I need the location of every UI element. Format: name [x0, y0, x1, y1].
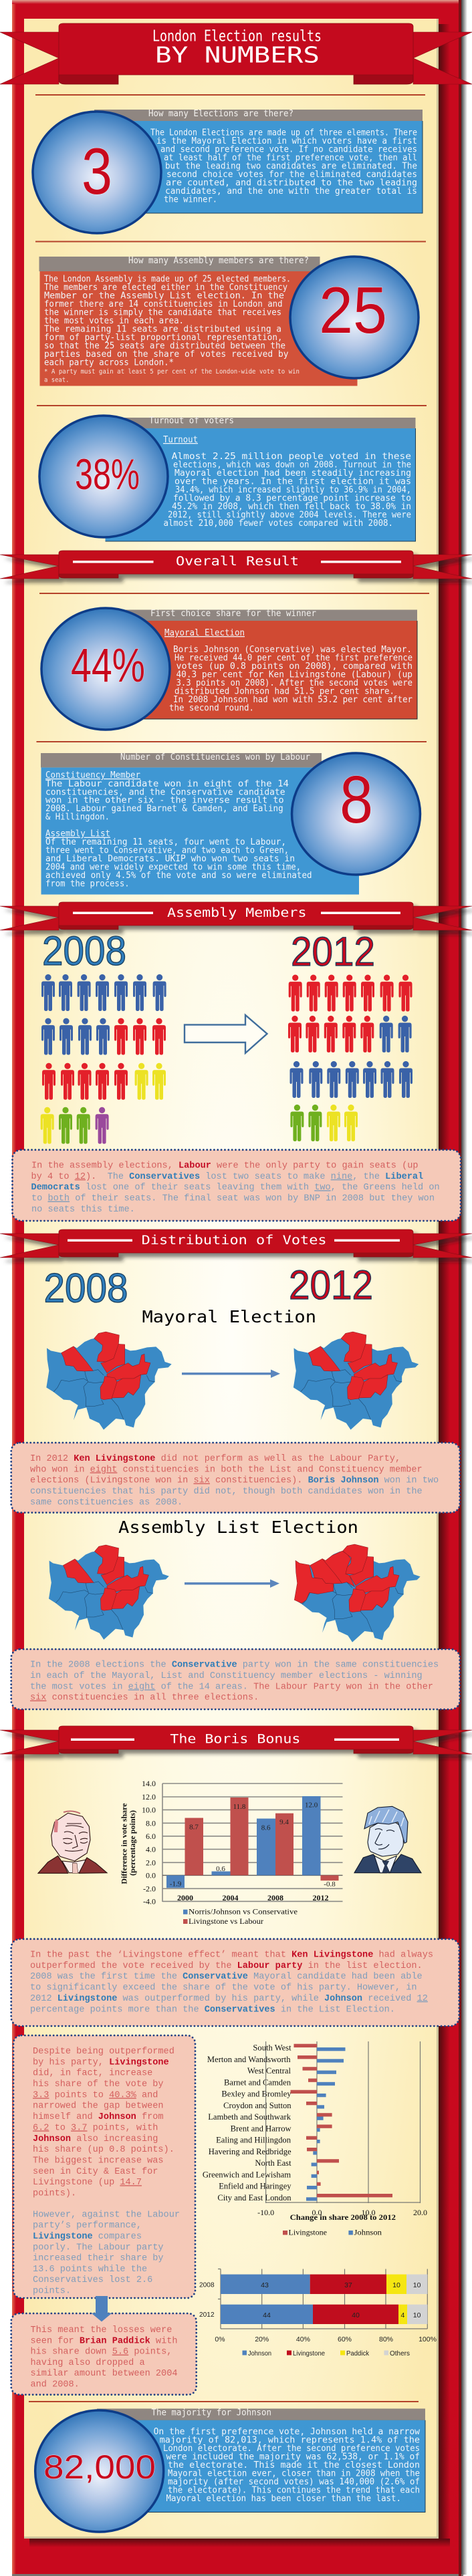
heading ribbon: distribution of votes: Distribution of Votes	[142, 1234, 327, 1248]
callout: assembly elections: In the assembly elections, Labour were the only party to gain seats (up	[31, 1161, 419, 1171]
arrow: 2008 to 2012	[185, 1015, 267, 1053]
callout: Livingstone share: narrowed the gap between	[33, 2102, 164, 2112]
text block: Constituency Member	[45, 770, 140, 780]
callout: mayoral result	[11, 1443, 460, 1513]
text block: the second round.	[169, 703, 254, 713]
text block: the winner.	[164, 194, 217, 204]
callout: Livingstone share: his share (up 0.8 points).	[33, 2145, 174, 2155]
text block: The members are elected either in the Constituency	[44, 283, 287, 293]
bar chart: candidate vs party difference: 4.0	[146, 1844, 156, 1854]
bar chart: candidate vs party difference: 2008	[267, 1893, 283, 1902]
text block: * A party must gain at least 5 per cent of the London-wide vote to win	[44, 368, 300, 376]
heading ribbon: assembly members	[0, 902, 472, 930]
text block: In 2008 Johnson had won with 53.2 per cent after	[173, 695, 412, 705]
text block	[150, 128, 417, 204]
bar chart: candidate vs party difference: 2012	[313, 1893, 329, 1902]
callout: assembly list result: the most votes in eight of the 14 areas. The Labour Party won in the other	[30, 1682, 433, 1692]
text block: 2004 and were widely expected to win some this time,	[45, 863, 301, 873]
text block: 2012, still slightly above 2004 levels. There were	[168, 510, 411, 520]
heading: How many Assembly members are there?	[128, 256, 309, 266]
bar chart: candidate vs party difference: 8.7	[189, 1824, 199, 1832]
bar chart: candidate vs party difference: 6.0	[146, 1832, 156, 1841]
bar chart: first preference share by candidate: 40	[352, 2311, 360, 2319]
year heading 2008: 2008	[42, 928, 126, 974]
callout: Paddick losses: having also dropped a	[31, 2358, 145, 2368]
title text: London Election results	[152, 28, 322, 45]
text block: Almost 2.25 million people voted in these	[172, 452, 411, 462]
year heading 2012: 2012	[291, 929, 375, 974]
number circle: 3: 3	[82, 134, 112, 208]
number circle: 25	[290, 257, 419, 378]
bar chart: first preference share by candidate	[199, 2269, 437, 2357]
text block: three went to Conservative, and two each to Green,	[45, 846, 289, 856]
bar chart: first preference share by candidate: 60%	[338, 2335, 352, 2343]
heading ribbon: overall result	[0, 551, 472, 579]
text block: Of the remaining 11 seats, four went to Labour,	[45, 837, 286, 847]
heading: Number of Constituencies won by Labour	[120, 752, 310, 762]
text block: London electorate. After the second preference votes	[163, 2444, 420, 2454]
bar chart: candidate vs party difference: 8.6	[261, 1824, 271, 1832]
text block	[163, 435, 411, 529]
callout: Livingstone effect: In the past the ‘Livingstone effect’ meant that Ken Livingstone had always	[30, 1950, 433, 1961]
panel: turnout	[39, 416, 416, 541]
callout: Livingstone share: Johnson also increasing	[33, 2134, 158, 2144]
text block: and Liberal Democrats. UKIP who won two seats in	[45, 854, 295, 864]
callout: Livingstone share: 13.6 points while the	[33, 2265, 147, 2275]
icon: Ken Livingstone caricature	[38, 1811, 107, 1873]
map: mayoral 2008	[46, 1332, 172, 1430]
bar chart: first preference share by candidate: 4	[400, 2311, 404, 2319]
text block: The Labour candidate won in eight of the 14	[45, 779, 289, 789]
text block: are counted, and distributed to the two leading	[166, 178, 417, 188]
callout: Paddick losses: and 2008.	[31, 2380, 80, 2390]
text block: Turnout	[163, 435, 198, 445]
text block: at least half of the first preference vote, then all	[164, 153, 417, 163]
bar chart: candidate vs party difference: 10.0	[142, 1806, 156, 1815]
number circle: 82,000: 82,000	[43, 2448, 156, 2486]
callout: Livingstone share: Livingstone compares	[33, 2232, 142, 2242]
text block: won in the other six - the inverse result to	[45, 796, 284, 806]
bar chart: first preference share by candidate: 44	[263, 2311, 271, 2319]
bar chart: candidate vs party difference: -1.9	[170, 1880, 182, 1888]
callout: Livingstone share: Conservatives lost 2.6	[33, 2275, 152, 2285]
bar chart: change in share 2008 to 2012: Brent and Harrow	[231, 2124, 291, 2133]
callout: assembly elections: no seats this time.	[31, 1205, 135, 1215]
year heading 2012: 2012	[289, 1262, 373, 1308]
text block: the winner is simply the candidate that receives	[44, 307, 281, 317]
bar chart: first preference share by candidate: 37	[344, 2281, 352, 2289]
text block: votes (up 0.8 points on 2008), compared with	[176, 662, 412, 672]
heading: assembly list election: Assembly List Election	[118, 1518, 358, 1537]
bar chart: change in share 2008 to 2012: Livingstone	[289, 2228, 327, 2237]
text block: achieved only 4.5% of the vote and so were eliminated	[45, 871, 312, 881]
text block	[44, 274, 300, 384]
text block: majority of 82,013, which represents 1.4% of the	[160, 2435, 420, 2446]
callout: Livingstone effect: to significantly exceed the share of the vote of his party. However, in	[30, 1983, 417, 1993]
bar chart: change in share 2008 to 2012: Lambeth and Southwark	[208, 2112, 291, 2122]
text block: 45.2% in 2008, which then fell back to 38.0% in	[172, 502, 411, 512]
callout: assembly elections	[12, 1150, 461, 1221]
callout: assembly elections: Democrats lost one of their seats leaving them with two, the Greens held on	[31, 1183, 440, 1193]
bar chart: change in share 2008 to 2012: 10.0	[361, 2208, 376, 2217]
text block: 2008. Labour gained Barnet & Camden, and Ealing	[45, 804, 283, 814]
text block: Member or the Assembly List election. In the	[44, 291, 284, 301]
bar chart: first preference share by candidate: 40%	[296, 2335, 310, 2343]
bar chart: first preference share by candidate: Others	[390, 2349, 410, 2357]
bar chart: first preference share by candidate: 20%	[255, 2335, 269, 2343]
heading ribbon: distribution of votes	[0, 1230, 472, 1258]
arrow	[185, 1580, 279, 1588]
text block: second choice votes for the eliminated candidates	[166, 170, 417, 180]
heading ribbon: the boris bonus	[0, 1726, 472, 1754]
text block: constituencies, and the Conservative candidate	[45, 787, 285, 797]
heading ribbon: assembly members: Assembly Members	[167, 906, 306, 920]
text block: He received 44.0 per cent of the first preference	[174, 654, 412, 663]
heading: First choice share for the winner	[150, 609, 316, 619]
bar chart: first preference share by candidate: 2012	[199, 2311, 215, 2319]
number circle: 25: 25	[319, 273, 387, 347]
text block: elections, which was down on 2008. Turnout in the	[173, 460, 411, 470]
callout: Paddick losses: seen for Brian Paddick with	[31, 2336, 178, 2346]
bar chart: change in share 2008 to 2012: Change in share 2008 to 2012	[290, 2212, 396, 2222]
callout: Livingstone effect	[11, 1939, 459, 2026]
bar chart: candidate vs party difference: 9.4	[279, 1818, 289, 1826]
text block: distributed Johnson had 51.5 per cent share.	[174, 686, 394, 696]
panel: how many elections	[33, 109, 423, 233]
callout: mayoral result: constituencies that his party did not, though both candidates won in the	[30, 1487, 423, 1497]
text block: majority (after second votes) was 140,000 (2.6% of	[168, 2477, 420, 2487]
text block: the electorate. This made it the closest London	[168, 2460, 420, 2470]
bar chart: first preference share by candidate: 100%	[419, 2335, 437, 2343]
bar chart: change in share 2008 to 2012: Bexley and Bromley	[221, 2090, 291, 2099]
bar chart: first preference share by candidate: 10	[392, 2281, 400, 2289]
number circle: 38%: 38%	[75, 450, 140, 498]
bar chart: change in share 2008 to 2012: Merton and Wandsworth	[207, 2055, 291, 2064]
arrow: down between callouts	[91, 2296, 112, 2321]
callout: Livingstone share: by his party, Livingstone	[33, 2057, 169, 2067]
panel: majority for Johnson	[35, 2408, 425, 2532]
text block: The London Elections are made up of three elements. There	[150, 128, 417, 138]
callout: assembly list result: In the 2008 elections the Conservative party won in the same constituencies	[30, 1661, 439, 1671]
bar chart: candidate vs party difference: 2.0	[146, 1858, 156, 1867]
callout: Livingstone share: 6.2 to 3.7 points, with	[33, 2123, 158, 2133]
callout: Livingstone share: poorly. The Labour party	[33, 2243, 164, 2253]
bar chart: change in share 2008 to 2012: Croydon and Sutton	[223, 2101, 291, 2110]
text block: Assembly List	[45, 829, 110, 839]
heading: The majority for Johnson	[151, 2408, 271, 2418]
bar chart: candidate vs party difference: 2000	[177, 1893, 193, 1902]
text block: Mayoral election ever, closer than in 2008 when the	[168, 2468, 420, 2478]
map: assembly list 2008	[49, 1545, 169, 1640]
bar chart: first preference share by candidate: 80%	[379, 2335, 393, 2343]
panel: constituencies won by Labour	[41, 752, 420, 895]
callout: Paddick losses: This meant the losses were	[31, 2325, 172, 2335]
heading: mayoral election: Mayoral Election	[142, 1307, 316, 1326]
bar chart: candidate vs party difference	[119, 1779, 342, 1926]
bar chart: candidate vs party difference: Livingstone vs Labour	[189, 1916, 263, 1926]
text block: 3.3 points on 2008). After the second votes were	[176, 678, 412, 688]
bar chart: first preference share by candidate: 10	[413, 2281, 421, 2289]
callout: assembly list result	[11, 1649, 460, 1709]
text block	[45, 770, 312, 889]
callout: Livingstone share: his share of the vote by	[33, 2080, 164, 2090]
text block: but the leading two candidates are eliminated. The	[165, 161, 417, 171]
bar chart: candidate vs party difference: 0.6	[216, 1865, 225, 1873]
callout: Paddick losses: his share down 5.6 points,	[31, 2347, 172, 2357]
bar chart: first preference share by candidate: Livingstone	[293, 2349, 325, 2357]
callout: Livingstone share: party’s performance,	[33, 2221, 142, 2231]
bar chart: candidate vs party difference: 12.0	[142, 1792, 156, 1802]
callout: Livingstone share: points).	[33, 2189, 76, 2198]
text block: Boris Johnson (Conservative) was elected Mayor.	[173, 645, 412, 655]
text block: The London Assembly is made up of 25 elected members.	[44, 274, 291, 285]
callout: Livingstone effect: 2008 was the first time the Conservative Mayoral candidate had been able	[30, 1972, 423, 1982]
callout: Paddick losses: similar amount between 2004	[31, 2369, 178, 2379]
map: mayoral 2012	[293, 1332, 419, 1430]
text block: former there are 14 constituencies in London and	[44, 299, 282, 309]
title text	[152, 28, 322, 68]
bar chart: candidate vs party difference: (percentage points)	[128, 1810, 137, 1876]
title ribbon	[0, 23, 472, 84]
text block: On the first preference vote, Johnson held a narrow	[154, 2427, 420, 2437]
heading: Turnout of voters	[149, 416, 234, 426]
bar chart: candidate vs party difference: 0.0	[146, 1870, 156, 1880]
text block: parties based on the share of votes received by	[44, 349, 289, 360]
panel: first choice share	[41, 608, 417, 730]
callout: assembly list result: six constituencies in all three elections.	[30, 1693, 259, 1703]
text block: from the process.	[45, 879, 130, 889]
bar chart: first preference share by candidate: 0%	[215, 2335, 225, 2343]
text block: Mayoral election had been steadily increasing	[174, 468, 411, 478]
bar chart: change in share 2008 to 2012: 0.0	[312, 2208, 322, 2217]
map: assembly list 2012	[294, 1544, 421, 1642]
text block: The remaining 11 seats are distributed using a	[44, 324, 281, 334]
bar chart: candidate vs party difference: Norris/Johnson vs Conservative	[189, 1907, 298, 1916]
bar chart: change in share 2008 to 2012: Havering and Redbridge	[209, 2147, 291, 2156]
text block: the most votes in each area.	[44, 316, 184, 326]
callout: Livingstone share: However, against the Labour	[33, 2210, 180, 2220]
text block	[154, 2427, 420, 2504]
text block: were included the majority was 62,538, or 1.1% of	[166, 2452, 420, 2462]
bar chart: change in share 2008 to 2012: Johnson	[354, 2228, 382, 2237]
bar chart: candidate vs party difference: -2.0	[143, 1884, 156, 1893]
bar chart: first preference share by candidate: 10	[413, 2311, 421, 2319]
title text: BY NUMBERS	[155, 41, 320, 68]
callout: mayoral result: In 2012 Ken Livingstone did not perform as well as the Labour Party,	[30, 1454, 400, 1464]
callout: mayoral result: who won in eight constituencies in both the List and Constituency member	[30, 1465, 423, 1475]
heading ribbon: overall result: Overall Result	[176, 555, 299, 569]
arrow	[182, 1370, 280, 1378]
callout: Livingstone share: points.	[33, 2287, 71, 2296]
text block: is the Mayoral Election in which voters have a first	[156, 136, 417, 146]
bar chart: change in share 2008 to 2012: 20.0	[413, 2208, 427, 2217]
pictogram: seats 2008	[41, 974, 166, 1144]
heading ribbon: the boris bonus: The Boris Bonus	[170, 1733, 300, 1747]
text block: almost 210,000 fewer votes compared with 2008.	[163, 519, 393, 529]
callout: assembly elections: to both of their seats. The final seat was won by BNP in 2008 but they won	[31, 1194, 435, 1204]
text block: and second preference vote. If no candidate receives	[160, 144, 417, 155]
bar chart: change in share 2008 to 2012: North East	[255, 2158, 291, 2168]
callout: Livingstone share: did, in fact, increase	[33, 2069, 152, 2079]
text block: 34.4%, which increased slightly to 36.9% in 2004,	[175, 485, 411, 495]
number circle: 8	[291, 753, 420, 875]
callout: Livingstone share: The biggest increase was	[33, 2156, 164, 2166]
number circle: 82,000	[35, 2410, 164, 2532]
bar chart: change in share 2008 to 2012: Greenwich and Lewisham	[203, 2170, 291, 2180]
callout: Livingstone effect: percentage points more than the Conservatives in the List Election.	[30, 2005, 395, 2015]
pictogram: seats 2012	[288, 975, 412, 1141]
bar chart: candidate vs party difference: -4.0	[143, 1896, 156, 1906]
text block: followed by a 8.3 percentage point increase to	[173, 493, 411, 503]
bar chart: change in share 2008 to 2012: West Central	[247, 2066, 291, 2076]
bar chart: candidate vs party difference: 2004	[222, 1893, 238, 1902]
text block: Mayoral election has been closer than the last.	[166, 2494, 401, 2504]
icon: Boris Johnson caricature	[354, 1806, 421, 1873]
text block: Mayoral Election	[164, 628, 245, 638]
bar chart: candidate vs party difference: 11.8	[233, 1803, 246, 1811]
text block: form of party-list proportional representation,	[44, 333, 282, 343]
text block: candidates, and the one with the greater total is	[165, 186, 417, 196]
bar chart: candidate vs party difference: -0.8	[324, 1880, 336, 1888]
callout: Livingstone share: Livingstone (up 14.7	[33, 2178, 142, 2188]
bar chart: candidate vs party difference: 12.0	[305, 1802, 318, 1810]
heading: How many Elections are there?	[148, 109, 293, 119]
callout: Livingstone share: 3.3 points to 40.3% and	[33, 2090, 158, 2100]
panel: assembly members count	[39, 256, 419, 386]
callout: mayoral result: same constituencies as 2008.	[30, 1497, 183, 1508]
bar chart: change in share 2008 to 2012: South West	[253, 2043, 291, 2053]
text block	[164, 628, 412, 713]
text block: each party across London.*	[44, 357, 174, 368]
bar chart: change in share 2008 to 2012: -10.0	[257, 2208, 274, 2217]
text block: 40.3 per cent for Ken Livingstone (Labour) (up	[176, 670, 412, 680]
callout: assembly elections: by 4 to 12). The Conservatives lost two seats to make nine, the Liberal	[31, 1172, 423, 1182]
number circle: 8: 8	[340, 762, 373, 837]
callout: Livingstone share: increased their share by	[33, 2254, 164, 2264]
callout: mayoral result: elections (Livingstone won in six constituencies). Boris Johnson won in two	[30, 1476, 439, 1486]
text block: & Hillingdon.	[45, 813, 110, 823]
text block: a seat.	[44, 377, 70, 384]
bar chart: first preference share by candidate: 2008	[199, 2281, 215, 2289]
callout: Paddick losses	[11, 2313, 197, 2395]
bar chart: candidate vs party difference: 14.0	[142, 1779, 156, 1788]
bar chart: change in share 2008 to 2012: Barnet and Camden	[224, 2078, 291, 2088]
number circle: 44%: 44%	[71, 639, 145, 692]
bar chart: change in share 2008 to 2012: City and East London	[217, 2193, 291, 2202]
bar chart: candidate vs party difference: 8.0	[146, 1818, 156, 1828]
number circle: 44%	[41, 608, 170, 730]
text block: so that the 25 seats are distributed between the	[44, 341, 285, 351]
bar chart: change in share 2008 to 2012: Ealing and Hillingdon	[216, 2136, 291, 2145]
callout: Livingstone share: himself and Johnson from	[33, 2112, 164, 2122]
bar chart: first preference share by candidate: 43	[261, 2281, 269, 2289]
text block: the electorate). This continues the trend that each	[168, 2485, 420, 2495]
callout: Livingstone share: seen in City & East for	[33, 2167, 158, 2177]
gridlines	[162, 1783, 342, 1901]
bar chart: candidate vs party difference: Difference in vote share	[119, 1803, 128, 1884]
callout: Livingstone effect: outperformed the vote received by the Labour party in the list election.	[30, 1961, 423, 1971]
year heading 2008: 2008	[44, 1266, 128, 1311]
number circle: 3	[33, 112, 161, 233]
bar chart: change in share 2008 to 2012	[203, 2041, 427, 2237]
callout: assembly list result: in each of the Mayoral, List and Constituency member elections - winning	[30, 1671, 423, 1681]
callout: Livingstone effect: 2012 Livingstone was outperformed by his party, while Johnson received 12	[30, 1994, 428, 2004]
text block: over the years. In the first election it was	[174, 476, 411, 486]
bar chart: change in share 2008 to 2012: Enfield and Haringey	[219, 2182, 291, 2191]
bar chart: first preference share by candidate: Paddick	[346, 2349, 370, 2357]
callout: Livingstone share: Despite being outperformed	[33, 2047, 174, 2057]
callout: Livingstone share	[13, 2035, 195, 2298]
number circle: 38%	[39, 416, 168, 537]
bar chart: first preference share by candidate: Johnson	[248, 2349, 271, 2357]
